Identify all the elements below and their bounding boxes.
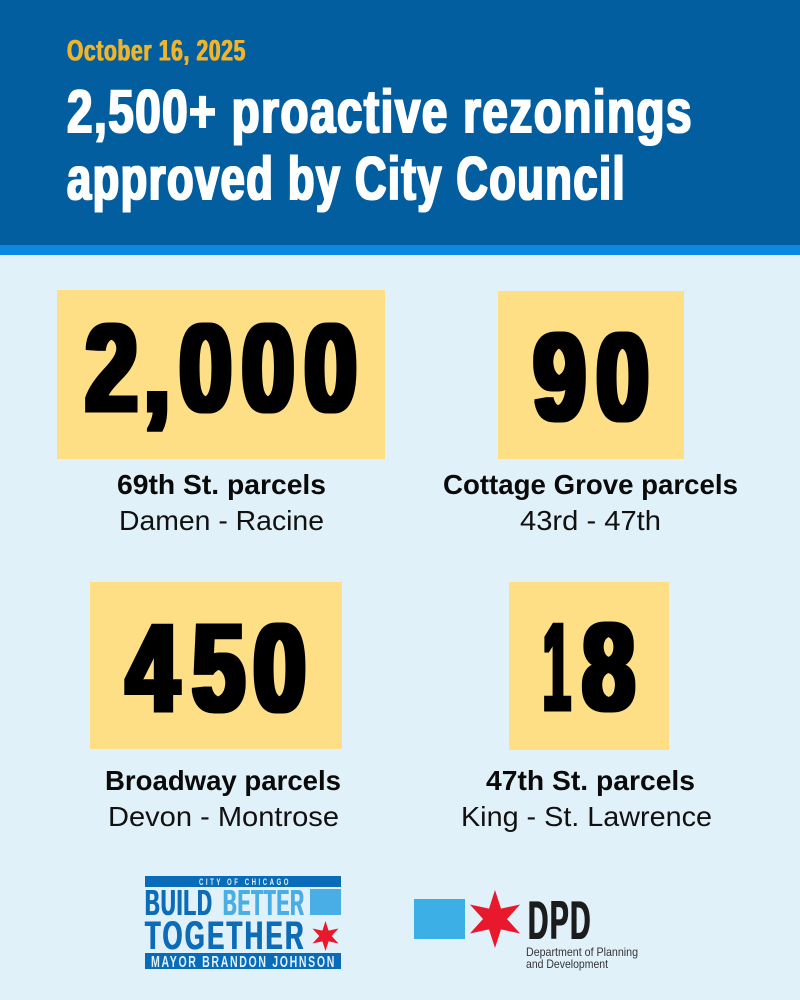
stat: 450 Broadway parcels: Devon - Montrose [108, 801, 339, 832]
date: October 16, 2025 [67, 34, 246, 68]
logo: Build Better Together: CITY OF CHICAGO [199, 877, 291, 888]
stat: 90 Cottage Grove parcels: 43rd - 47th [520, 505, 661, 536]
stat: 90 Cottage Grove parcels [443, 291, 738, 536]
stat: 450 Broadway parcels [90, 582, 342, 832]
logo: Build Better Together: TOGETHER [145, 914, 306, 958]
logo: DPD [414, 889, 638, 971]
stat: 18 47th St. parcels: 47th St. parcels [486, 765, 695, 796]
stat: 450 Broadway parcels: Broadway parcels [105, 765, 341, 796]
stat: 18 47th St. parcels: King - St. Lawrence [461, 801, 712, 832]
stat: 90 Cottage Grove parcels: Cottage Grove parcels [443, 469, 738, 500]
logo: Build Better Together [145, 876, 341, 971]
header banner [0, 0, 800, 255]
logo: DPD: DPD [528, 889, 592, 951]
logo: Build Better Together: MAYOR BRANDON JOHNSON [151, 954, 336, 971]
stat: 2,000 69th St. parcels: 69th St. parcels [117, 469, 326, 500]
logo: Build Better Together: BETTER [223, 882, 305, 923]
stat: 2,000 69th St. parcels: 2,000 [85, 300, 357, 438]
logo: Build Better Together: BUILD [145, 882, 213, 923]
stat: 450 Broadway parcels: 450 [126, 600, 306, 738]
stat: 18 47th St. parcels: 1 [543, 600, 571, 738]
logo: DPD: Department of Planning [526, 945, 638, 959]
logo: DPD: and Development [526, 957, 609, 971]
stat: 2,000 69th St. parcels: Damen - Racine [119, 505, 324, 536]
stat: 90 Cottage Grove parcels: 90 [533, 309, 649, 447]
stat: 2,000 69th St. parcels [57, 290, 385, 536]
stat: 18 47th St. parcels [461, 582, 712, 832]
stat: 18 47th St. parcels: 8 [582, 599, 635, 737]
title [67, 78, 693, 212]
